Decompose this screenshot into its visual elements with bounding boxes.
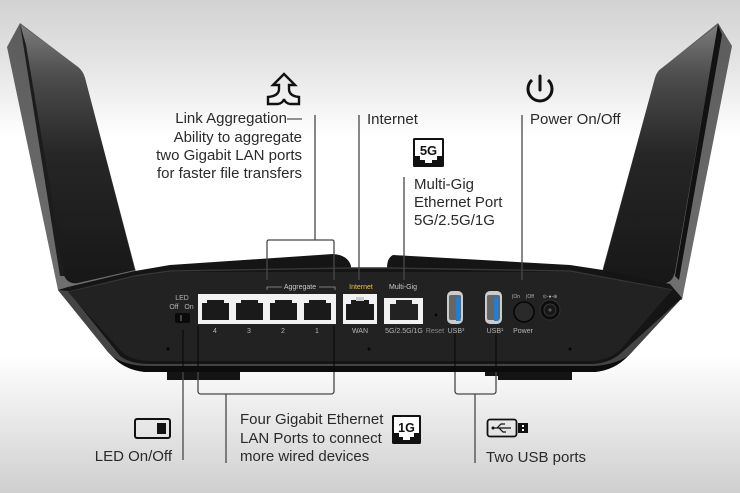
icon: 1G port: 1G <box>398 421 415 435</box>
LAN ports: 2 <box>281 328 285 335</box>
text: internet: Internet <box>367 111 419 128</box>
multi-gig port <box>384 284 423 335</box>
icon: power <box>528 76 552 101</box>
USB ports <box>447 291 504 335</box>
rear panel <box>68 272 672 361</box>
reset <box>426 313 444 335</box>
text: link aggregation: for faster file transfers <box>157 165 302 182</box>
text: link aggregation: Ability to aggregate <box>174 129 302 146</box>
power button and DC jack: |On <box>512 294 520 300</box>
LED switch: LED <box>175 295 189 302</box>
LAN ports: 3 <box>247 328 251 335</box>
LED switch <box>169 295 194 323</box>
aggregate label <box>267 284 335 291</box>
text: power: Power On/Off <box>530 111 621 128</box>
USB ports: USB³ <box>448 328 465 335</box>
left antenna <box>7 23 140 300</box>
outer shell <box>58 254 682 372</box>
USB ports: USB¹ <box>487 328 504 335</box>
text: multi-gig: 5G/2.5G/1G <box>414 212 495 229</box>
aggregate label: Aggregate <box>284 284 316 291</box>
icon: USB stick <box>488 420 528 436</box>
shell top edge <box>68 268 672 292</box>
icon: link aggregation arrows <box>268 74 299 104</box>
WAN port <box>343 284 377 335</box>
reset: Reset <box>426 328 444 335</box>
LAN ports <box>198 294 336 335</box>
text: LAN ports: Four Gigabit Ethernet <box>240 411 384 428</box>
text: link aggregation: Link Aggregation— <box>175 110 302 127</box>
LED switch: On <box>184 304 194 311</box>
power button and DC jack: ⊙-●-⊕ <box>543 294 557 300</box>
power button and DC jack: |Off <box>526 294 535 300</box>
left rim <box>58 290 682 372</box>
multi-gig port: 5G/2.5G/1G <box>385 328 423 335</box>
text: multi-gig: Multi-Gig <box>414 176 474 193</box>
power button and DC jack: Power <box>513 328 534 335</box>
icon: 5G port <box>413 138 444 167</box>
right antenna <box>600 23 732 300</box>
text: LED: LED On/Off <box>95 448 173 465</box>
icon: LED switch <box>135 419 170 438</box>
text: LAN ports: LAN Ports to connect <box>240 430 383 447</box>
text: link aggregation: two Gigabit LAN ports <box>156 147 302 164</box>
router body <box>58 254 682 380</box>
screw holes <box>166 348 170 350</box>
multi-gig port: Multi-Gig <box>389 284 417 291</box>
lower black lip <box>112 356 628 372</box>
icon: 5G port: 5G <box>420 143 437 158</box>
text: USB: Two USB ports <box>486 449 586 466</box>
text: LAN ports: more wired devices <box>240 448 369 465</box>
icon: 1G port <box>392 415 421 444</box>
feet <box>167 370 572 380</box>
LAN ports: 4 <box>213 328 217 335</box>
leader lines <box>183 115 522 463</box>
text: multi-gig: Ethernet Port <box>414 194 503 211</box>
LED switch: Off <box>169 304 179 311</box>
LAN ports: 1 <box>315 328 319 335</box>
WAN port: WAN <box>352 328 368 335</box>
WAN port: Internet <box>349 284 373 291</box>
power button and DC jack <box>512 294 560 335</box>
